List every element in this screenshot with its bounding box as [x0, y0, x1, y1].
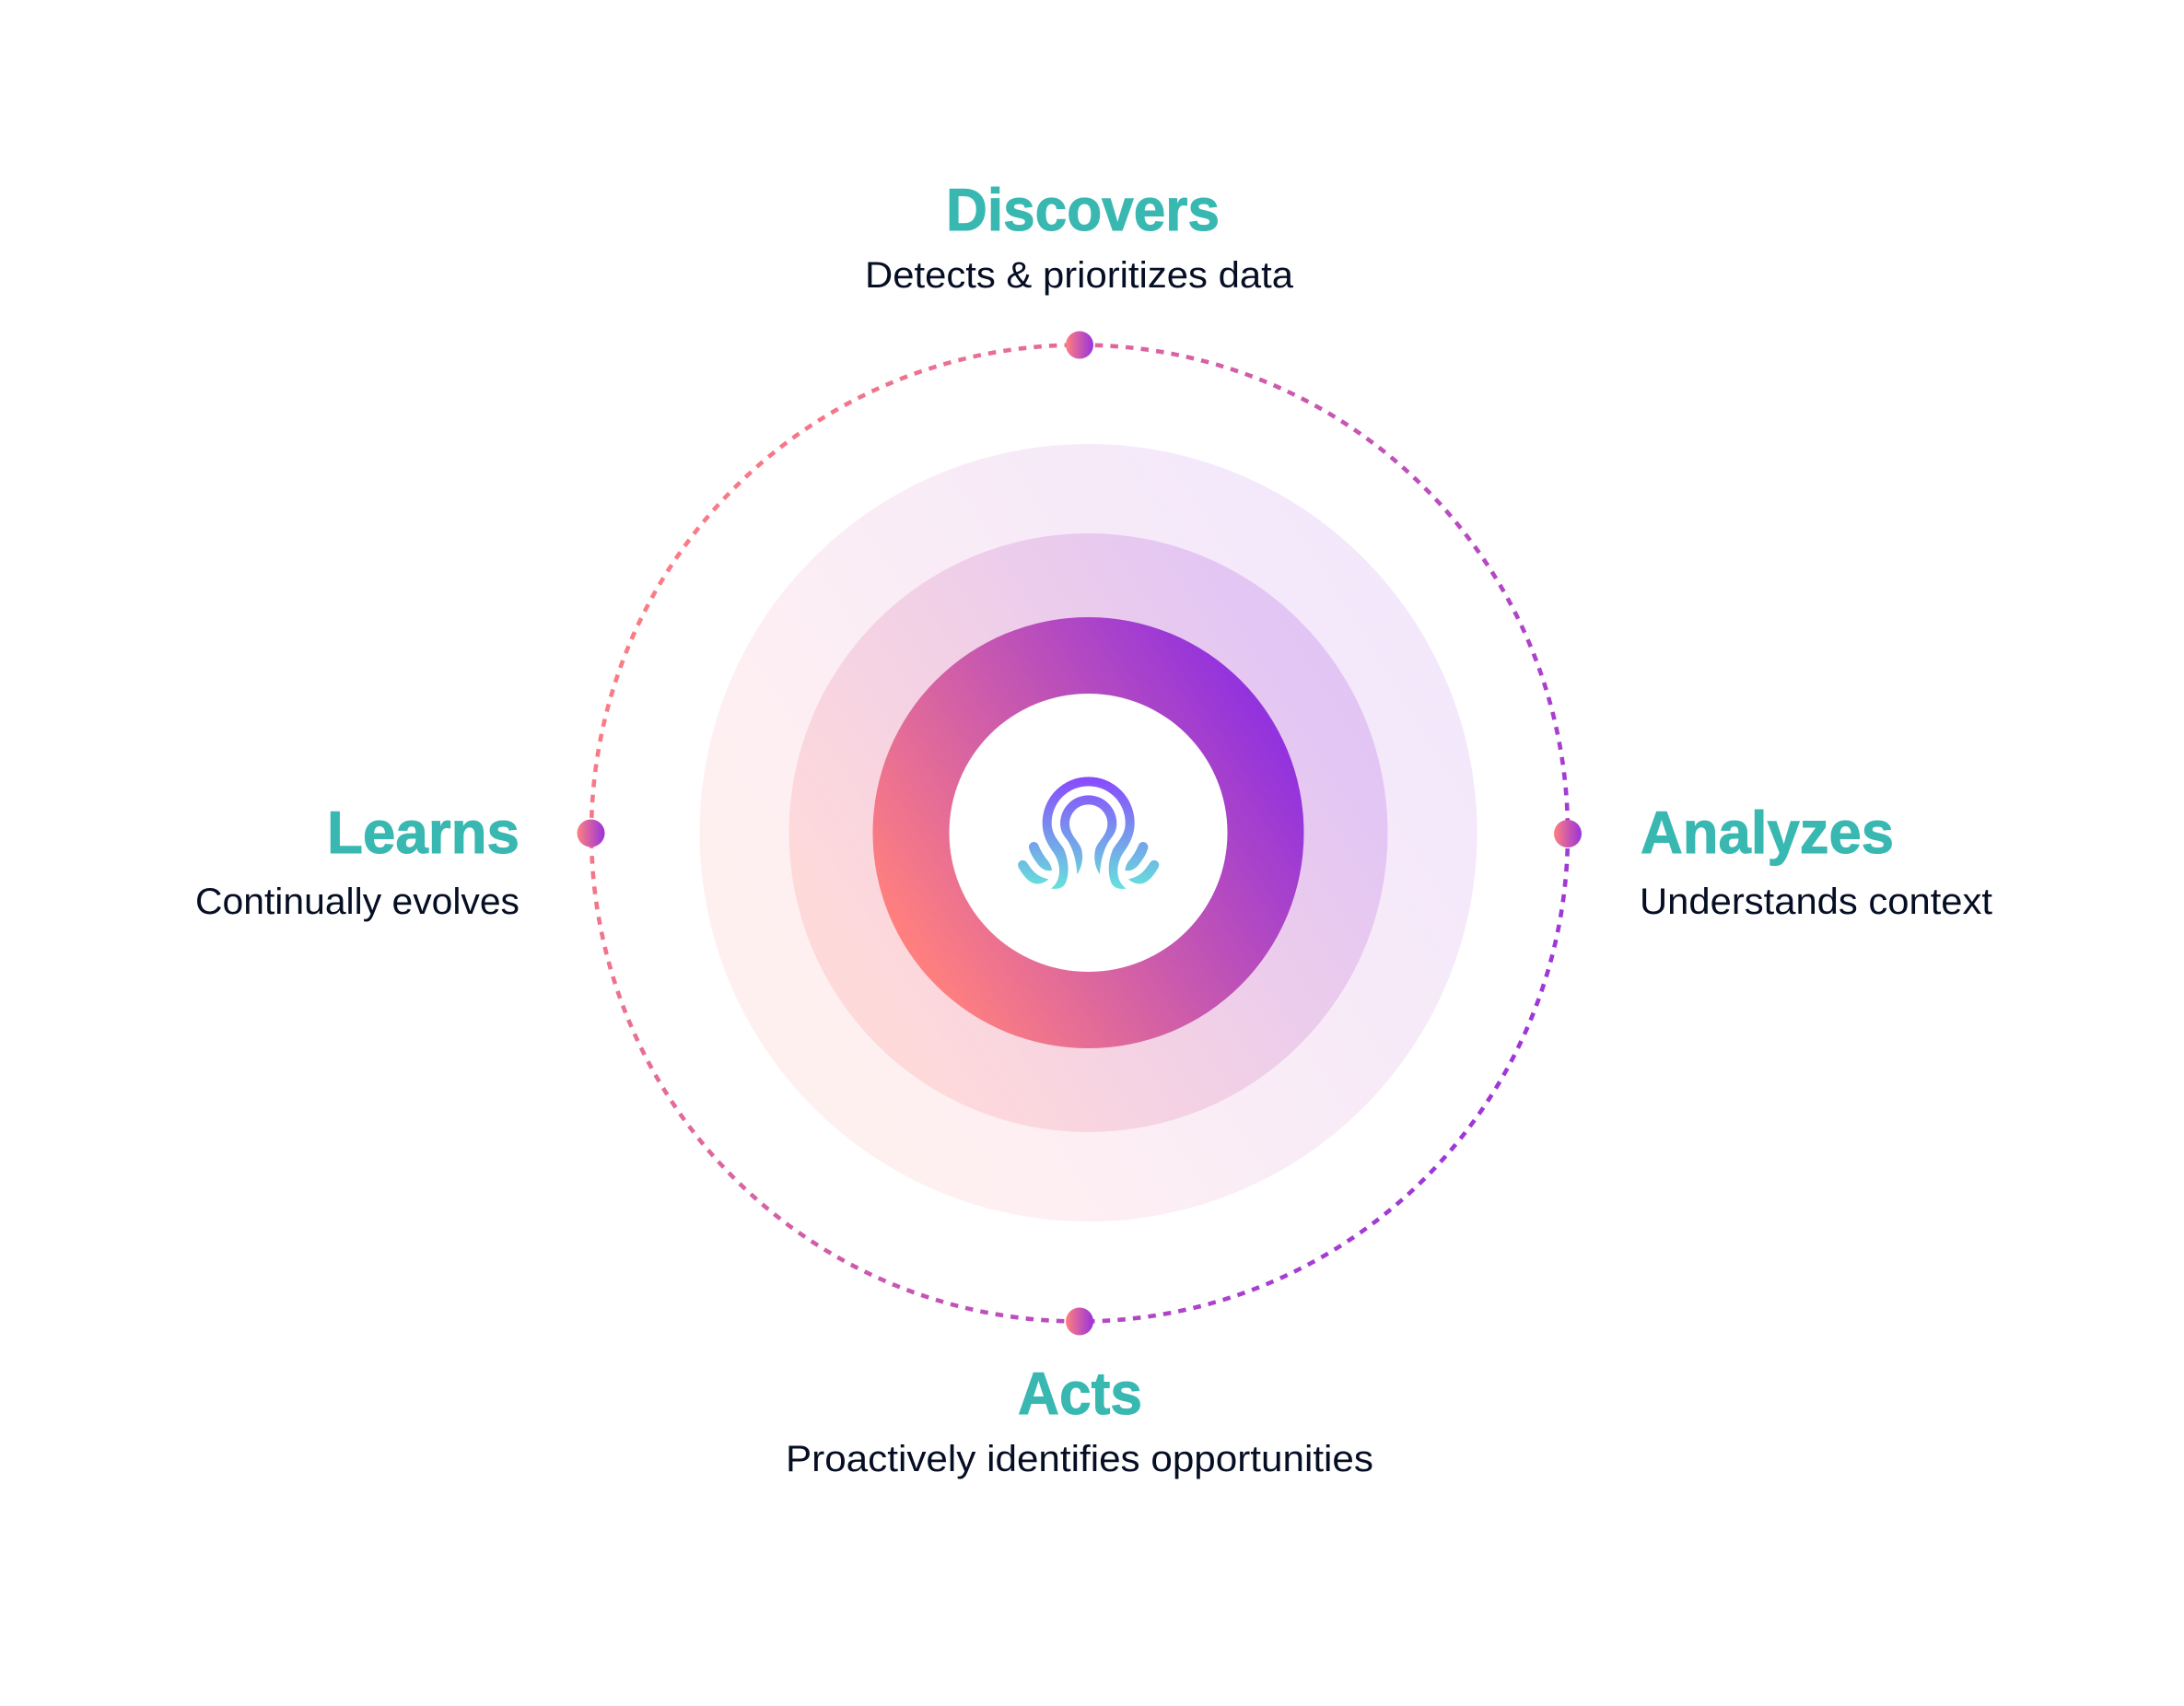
middle ring [788, 533, 1387, 1132]
white centre disc [949, 694, 1227, 972]
outer pale ring [700, 444, 1477, 1221]
dashed orbit circle [591, 345, 1568, 1321]
heading: Analyzes [1641, 799, 1894, 866]
heading: Learns [327, 799, 520, 866]
heading: Acts [1018, 1360, 1142, 1427]
node dot: bottom [1066, 1308, 1093, 1336]
node dot: left [577, 820, 604, 847]
inner saturated ring [873, 617, 1304, 1048]
node dot: top [1066, 332, 1093, 359]
description: Detects & prioritizes data [865, 255, 1294, 296]
description: Proactively identifies opportunities [786, 1439, 1373, 1479]
label: Learns [195, 799, 520, 922]
description: Understands context [1640, 882, 1992, 922]
node dot: right [1554, 820, 1582, 847]
icon: octopus logo [1018, 777, 1159, 889]
label: Analyzes [1640, 799, 1992, 922]
label: Discovers [865, 176, 1294, 296]
description: Continually evolves [195, 882, 520, 922]
heading: Discovers [946, 176, 1220, 243]
label: Acts [786, 1360, 1373, 1479]
concentric gradient rings [700, 444, 1477, 1221]
